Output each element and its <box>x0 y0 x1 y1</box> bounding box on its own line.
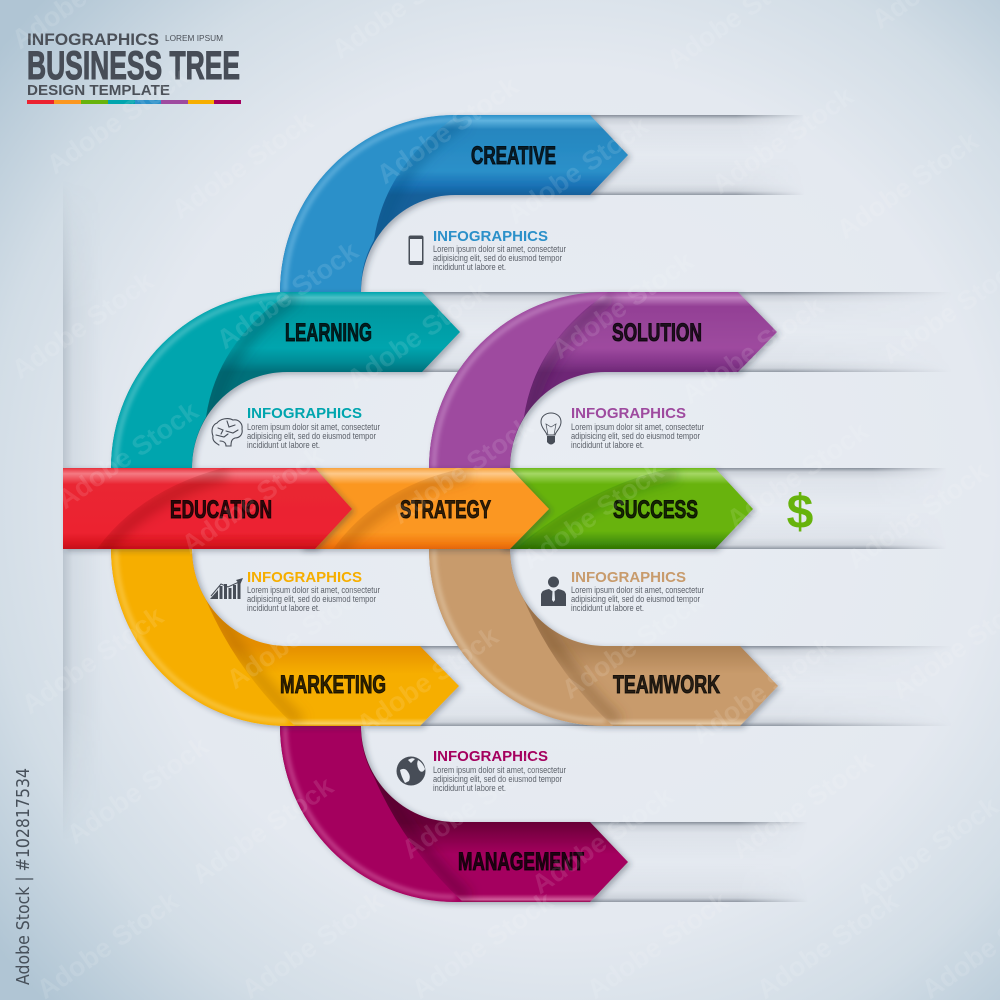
watermark text: Adobe Stock <box>341 275 494 395</box>
watermark text: Adobe Stock <box>16 600 169 720</box>
text block: marketing: incididunt ut labore et. <box>247 603 320 613</box>
text block: learning <box>247 405 380 450</box>
icon: light bulb <box>541 413 561 444</box>
watermark text: Adobe Stock <box>351 620 504 740</box>
text block: creative: adipisicing elit, sed do eiusmod tempor <box>433 253 562 263</box>
text block: marketing: INFOGRAPHICS <box>247 569 362 586</box>
watermark text: Adobe Stock <box>676 290 829 410</box>
watermark text: Adobe Stock <box>51 395 204 515</box>
icon: brain <box>212 419 242 446</box>
text block: learning: Lorem ipsum dolor sit amet, consectetur <box>247 422 380 432</box>
text block: marketing <box>247 569 380 613</box>
watermark text: Adobe Stock <box>851 790 1000 910</box>
icon: globe <box>396 756 426 786</box>
text block: solution: INFOGRAPHICS <box>571 405 686 422</box>
left vertical shadow <box>63 215 78 805</box>
watermark text: Adobe Stock <box>166 105 319 225</box>
ribbon: creative <box>280 115 628 292</box>
label: success: SUCCESS <box>613 496 698 524</box>
text block: management: incididunt ut labore et. <box>433 783 506 793</box>
text block: teamwork: Lorem ipsum dolor sit amet, consectetur <box>571 585 704 595</box>
watermark text: Adobe Stock <box>706 80 859 200</box>
watermark text: Adobe Stock <box>831 125 984 245</box>
arrow: education <box>63 468 352 555</box>
text block: marketing: adipisicing elit, sed do eiusmod tempor <box>247 594 376 604</box>
text block: solution: Lorem ipsum dolor sit amet, consectetur <box>571 422 704 432</box>
text block: learning: adipisicing elit, sed do eiusmod tempor <box>247 431 376 441</box>
watermark text: Adobe Stock <box>726 745 879 865</box>
text block: management <box>433 748 566 793</box>
stock id text: Adobe Stock | #102817534 <box>13 768 34 985</box>
watermark text: Adobe Stock <box>6 265 159 385</box>
watermark text: Adobe Stock <box>686 630 839 750</box>
slot shadow: creative <box>590 115 805 195</box>
watermark text: Adobe Stock <box>501 110 654 230</box>
ribbon: marketing <box>111 549 459 726</box>
watermark text: Adobe Stock <box>186 770 339 890</box>
watermark text: Adobe Stock <box>371 70 524 190</box>
title: design template: DESIGN TEMPLATE <box>27 82 170 99</box>
text block: learning: INFOGRAPHICS <box>247 405 362 422</box>
label: education: EDUCATION <box>170 496 272 524</box>
ribbon: management <box>280 726 628 902</box>
text block: management: Lorem ipsum dolor sit amet, consectetur <box>433 765 566 775</box>
label: management: MANAGEMENT <box>458 848 584 876</box>
text block: teamwork <box>571 569 704 613</box>
title block <box>27 30 241 104</box>
ribbon: teamwork <box>429 549 778 726</box>
watermark text: Adobe Stock <box>721 415 874 535</box>
text block: teamwork: adipisicing elit, sed do eiusmod tempor <box>571 594 700 604</box>
ribbon: solution <box>429 292 777 468</box>
text block: creative: incididunt ut labore et. <box>433 262 506 272</box>
label: learning: LEARNING <box>285 319 372 347</box>
text block: solution: adipisicing elit, sed do eiusmod tempor <box>571 431 700 441</box>
watermark text: Adobe Stock <box>516 455 669 575</box>
icon: phone <box>408 236 424 265</box>
watermark text: Adobe Stock <box>556 585 709 705</box>
label: strategy: STRATEGY <box>400 496 491 524</box>
title: infographics: INFOGRAPHICS <box>27 30 159 49</box>
title: business tree: BUSINESS TREE <box>27 44 240 88</box>
text block: learning: incididunt ut labore et. <box>247 440 320 450</box>
watermark text: Adobe Stock <box>386 410 539 530</box>
slot shadow: marketing and teamwork <box>420 646 952 726</box>
text block: creative: INFOGRAPHICS <box>433 228 548 245</box>
text block: teamwork: incididunt ut labore et. <box>571 603 644 613</box>
slot shadow: learning and solution <box>422 292 952 372</box>
icon: dollar: $ <box>787 486 814 539</box>
text block: solution: incididunt ut labore et. <box>571 440 644 450</box>
label: solution: SOLUTION <box>612 319 702 347</box>
watermark text: Adobe Stock <box>211 235 364 355</box>
watermark text: Adobe Stock <box>396 745 549 865</box>
icon: businessman <box>541 576 566 606</box>
slot shadow: management <box>590 822 808 902</box>
watermark text: Adobe Stock <box>546 245 699 365</box>
label: marketing: MARKETING <box>280 671 386 699</box>
label: creative: CREATIVE <box>471 142 556 170</box>
colour strip <box>27 100 241 104</box>
watermark text: Adobe Stock <box>61 730 214 850</box>
text block: solution <box>571 405 704 450</box>
text block: management: INFOGRAPHICS <box>433 748 548 765</box>
icon: growth chart <box>210 578 243 599</box>
watermark text: Adobe Stock <box>841 455 994 575</box>
text block: marketing: Lorem ipsum dolor sit amet, consectetur <box>247 585 380 595</box>
title: lorem ipsum: LOREM IPSUM <box>165 33 223 43</box>
text block: creative: Lorem ipsum dolor sit amet, consectetur <box>433 244 566 254</box>
text block: creative <box>433 228 566 272</box>
slot shadow: success <box>715 468 947 549</box>
label: teamwork: TEAMWORK <box>613 671 720 699</box>
arrow: success <box>500 468 753 555</box>
arrow: strategy <box>300 468 549 555</box>
text block: teamwork: INFOGRAPHICS <box>571 569 686 586</box>
text block: management: adipisicing elit, sed do eiusmod tempor <box>433 774 562 784</box>
watermark text: Adobe Stock <box>176 440 329 560</box>
watermark text: Adobe Stock <box>526 780 679 900</box>
watermark text: Adobe Stock <box>41 60 194 180</box>
ribbon: learning <box>111 292 460 468</box>
watermark text: Adobe Stock <box>221 575 374 695</box>
